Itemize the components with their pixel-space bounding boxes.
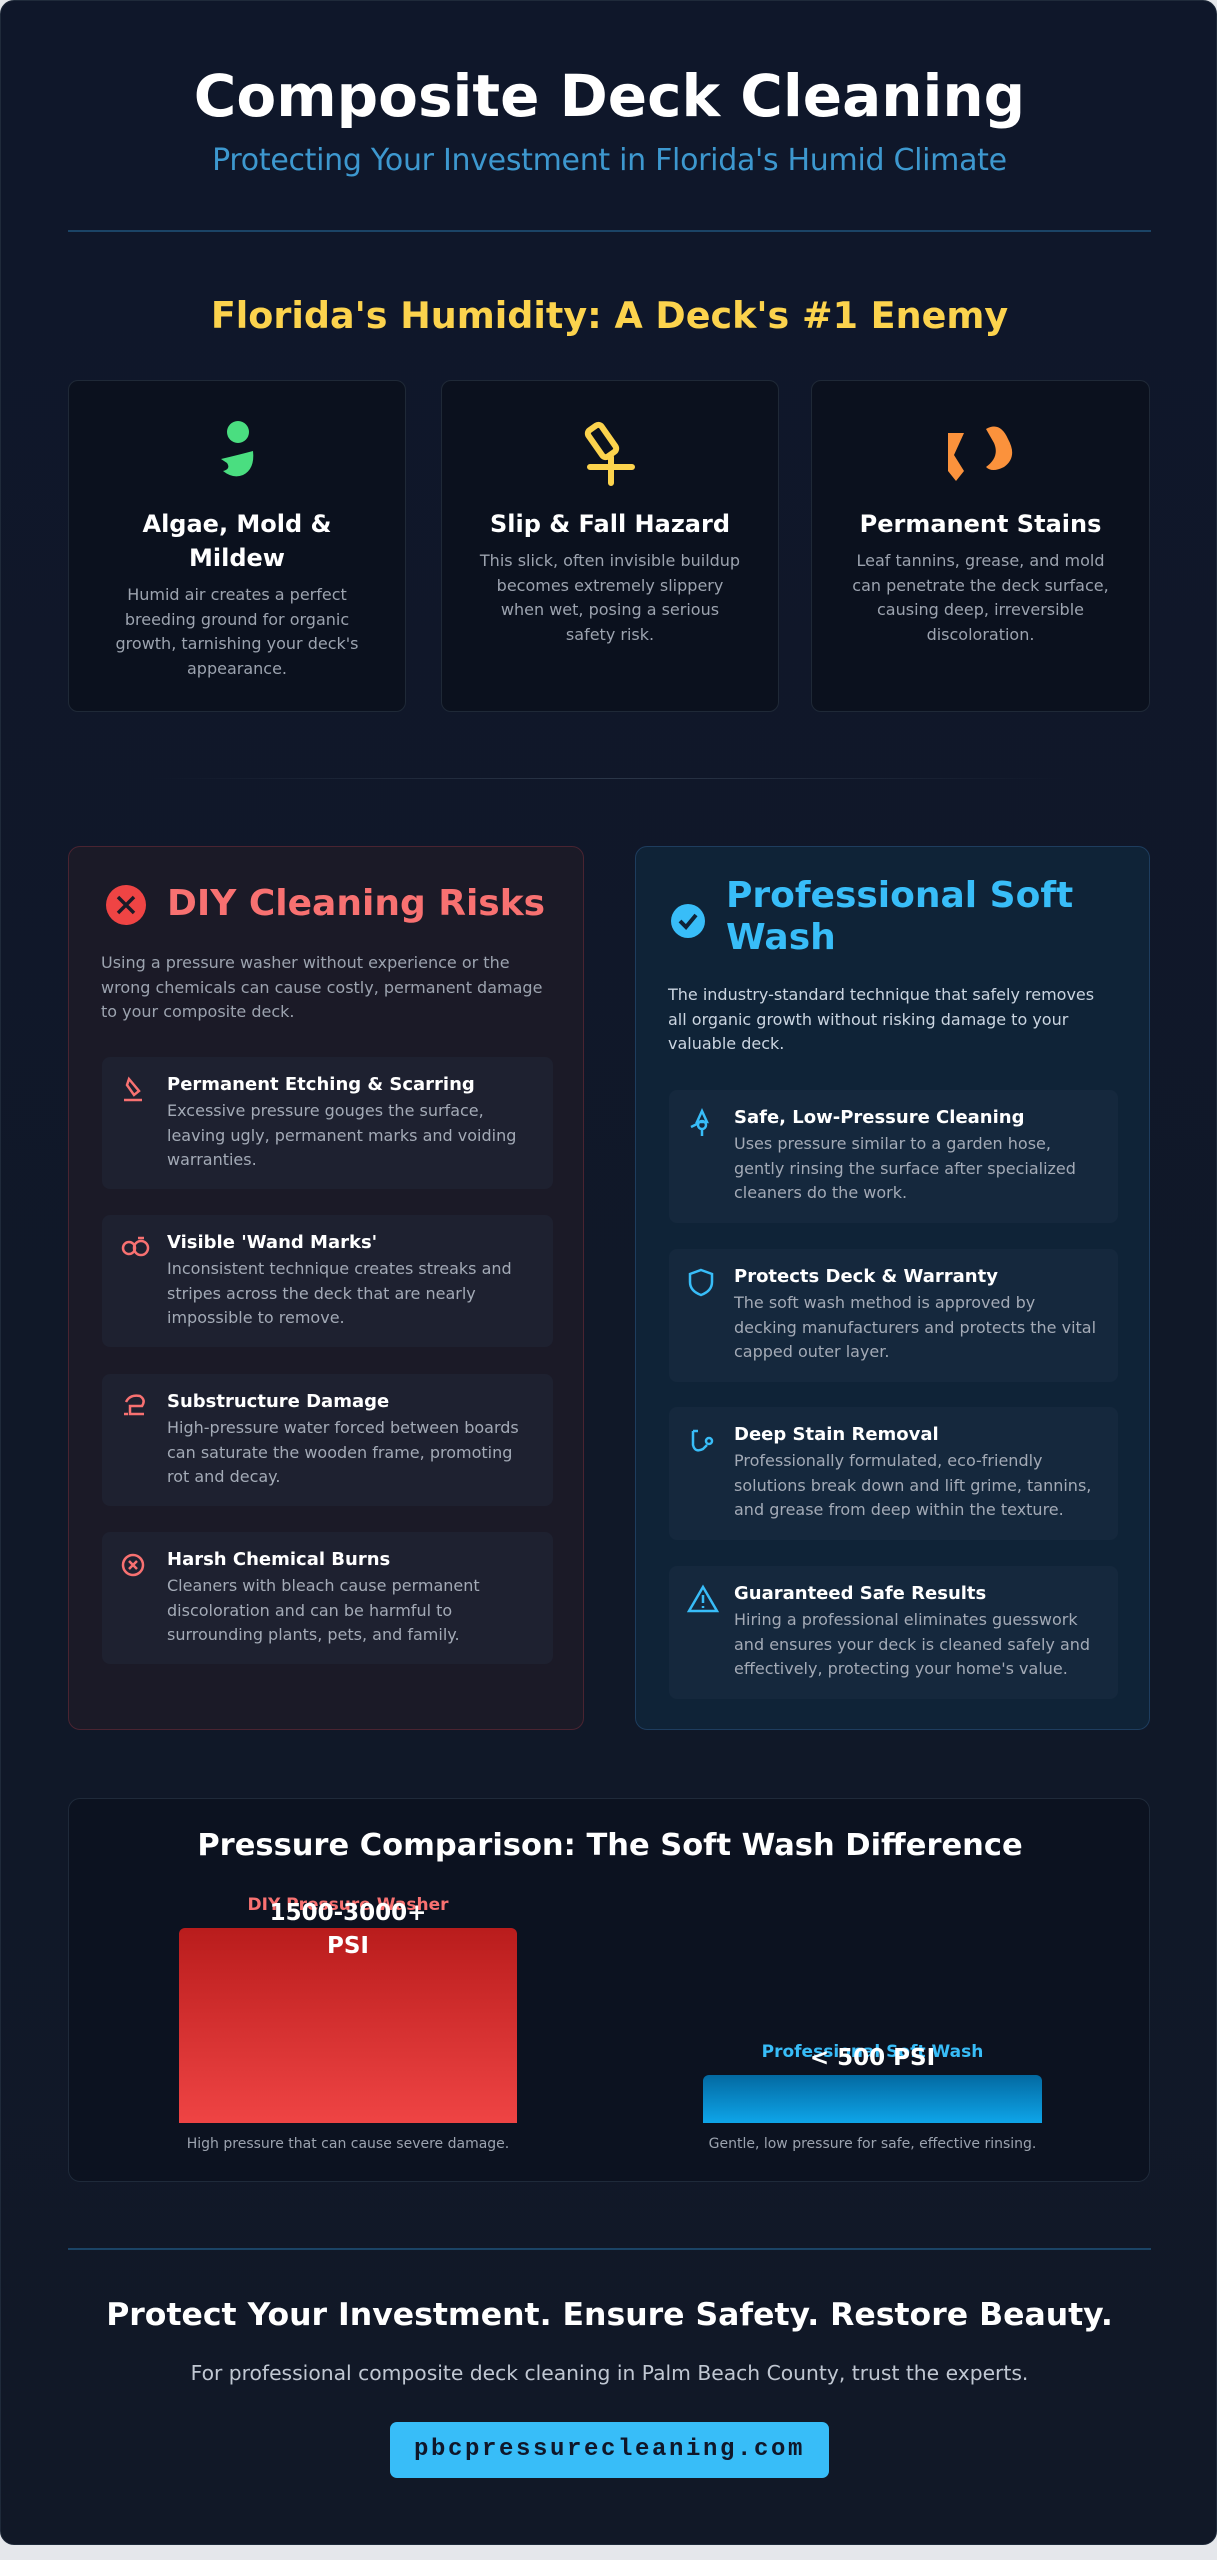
button: website <box>390 2422 829 2478</box>
item: wand marks: Inconsistent technique creates streaks and stripes across the deck that are nearly impossible to remove. <box>167 1259 512 1327</box>
icon: stains <box>948 426 1012 481</box>
intro text: The industry-standard technique that safely removes all organic growth without risking damage to your valuable deck. <box>668 985 1094 1053</box>
chart title: Pressure Comparison: The Soft Wash Difference <box>197 1828 1023 1863</box>
title: Composite Deck Cleaning <box>194 62 1025 130</box>
panel: DIY risks <box>68 846 584 1730</box>
panel: pressure comparison <box>68 1798 1150 2182</box>
bar: DIY: PSI <box>327 1933 369 1959</box>
heading: pro <box>671 875 1073 958</box>
item: low pressure: Uses pressure similar to a garden hose, gently rinsing the surface after specialized cleaners do the work. <box>734 1134 1076 1202</box>
card: algae <box>68 380 406 712</box>
item: protects deck: Protects Deck & Warranty <box>734 1266 998 1287</box>
item: guaranteed: Guaranteed Safe Results <box>734 1583 986 1604</box>
item: etching: Excessive pressure gouges the surface, leaving ugly, permanent marks and voiding warranties. <box>167 1101 516 1169</box>
item: deep stain <box>669 1407 1118 1540</box>
card: slip: This slick, often invisible buildup <box>480 551 740 570</box>
item: wand marks <box>102 1215 553 1347</box>
bar: Pro: Professional Soft Wash <box>762 2042 983 2062</box>
item: etching <box>102 1057 553 1189</box>
item: low pressure <box>669 1090 1118 1223</box>
bar: DIY: 1500-3000+ <box>270 1900 426 1926</box>
bar: Pro <box>703 2042 1042 2152</box>
card: stains: Leaf tannins, grease, and mold can penetrate the deck surface, causing deep, irreversible discoloration. <box>852 551 1109 644</box>
item: wand marks: Visible 'Wand Marks' <box>167 1232 377 1253</box>
heading: pro: Professional Soft <box>726 875 1073 916</box>
item: protects deck: decking manufacturers and protects the vital <box>734 1318 1096 1336</box>
CTA heading: Protect Your Investment. Ensure Safety. Restore Beauty. <box>106 2297 1113 2333</box>
card: slip <box>441 380 779 712</box>
icon: slip <box>584 422 635 486</box>
bar: DIY: High pressure that can cause severe damage. <box>187 2136 509 2152</box>
card: algae: Algae, Mold & <box>142 510 332 538</box>
panel: professional soft wash <box>635 846 1150 1730</box>
heading: pro: Wash <box>726 917 836 958</box>
subtitle: Protecting Your Investment in Florida's Humid Climate <box>212 143 1007 178</box>
item: guaranteed: Hiring a professional eliminates guesswork and ensures your deck is cleaned safely and effectively, protecting your home's value. <box>734 1610 1090 1678</box>
bar: DIY <box>179 1895 517 2152</box>
heading: DIY: DIY Cleaning Risks <box>167 883 545 924</box>
bar: DIY: DIY Pressure Washer <box>248 1895 448 1915</box>
bar: Pro: Gentle, low pressure for safe, effective rinsing. <box>709 2136 1036 2152</box>
card: slip: when wet, posing a serious <box>501 600 719 619</box>
item: guaranteed <box>669 1566 1118 1699</box>
card: stains: Permanent Stains <box>860 510 1101 538</box>
item: protects deck: The soft wash method is approved by <box>734 1293 1035 1312</box>
item: deep stain: Professionally formulated, eco-friendly solutions break down and lift grime, tannins, and grease from deep within the texture. <box>734 1451 1091 1519</box>
section heading: humidity: Florida's Humidity: A Deck's #1 Enemy <box>211 294 1008 337</box>
item: protects deck: capped outer layer. <box>734 1342 889 1361</box>
card: algae: Mildew <box>189 544 285 572</box>
item: chemical burns: Cleaners with bleach cause permanent discoloration and can be harmful to surrounding plants, pets, and family. <box>167 1576 480 1644</box>
item: substructure: Substructure Damage <box>167 1391 389 1412</box>
bar chart <box>179 1895 1042 2152</box>
item: substructure <box>102 1374 553 1506</box>
icon: algae <box>221 421 254 476</box>
item: etching: Permanent Etching & Scarring <box>167 1074 475 1095</box>
item: chemical burns: Harsh Chemical Burns <box>167 1549 390 1570</box>
item: substructure: High-pressure water forced between boards can saturate the wooden frame, promoting rot and decay. <box>167 1418 519 1486</box>
button: website: pbcpressurecleaning.com <box>414 2436 805 2463</box>
item: protects deck <box>669 1249 1118 1382</box>
card: slip: becomes extremely slippery <box>497 576 723 594</box>
bar: Pro: < 500 PSI <box>810 2045 935 2071</box>
item: chemical burns <box>102 1532 553 1664</box>
CTA text: For professional composite deck cleaning in Palm Beach County, trust the experts. <box>191 2361 1028 2385</box>
item: deep stain: Deep Stain Removal <box>734 1424 939 1445</box>
card: slip: safety risk. <box>566 624 654 644</box>
card: stains <box>811 380 1150 712</box>
item: low pressure: Safe, Low-Pressure Cleaning <box>734 1107 1024 1128</box>
card: slip: Slip & Fall Hazard <box>490 510 730 538</box>
intro text: Using a pressure washer without experience or the wrong chemicals can cause costly, permanent damage to your composite deck. <box>101 953 542 1021</box>
card: algae: Humid air creates a perfect breeding ground for organic growth, tarnishing your deck's appearance. <box>116 585 358 678</box>
